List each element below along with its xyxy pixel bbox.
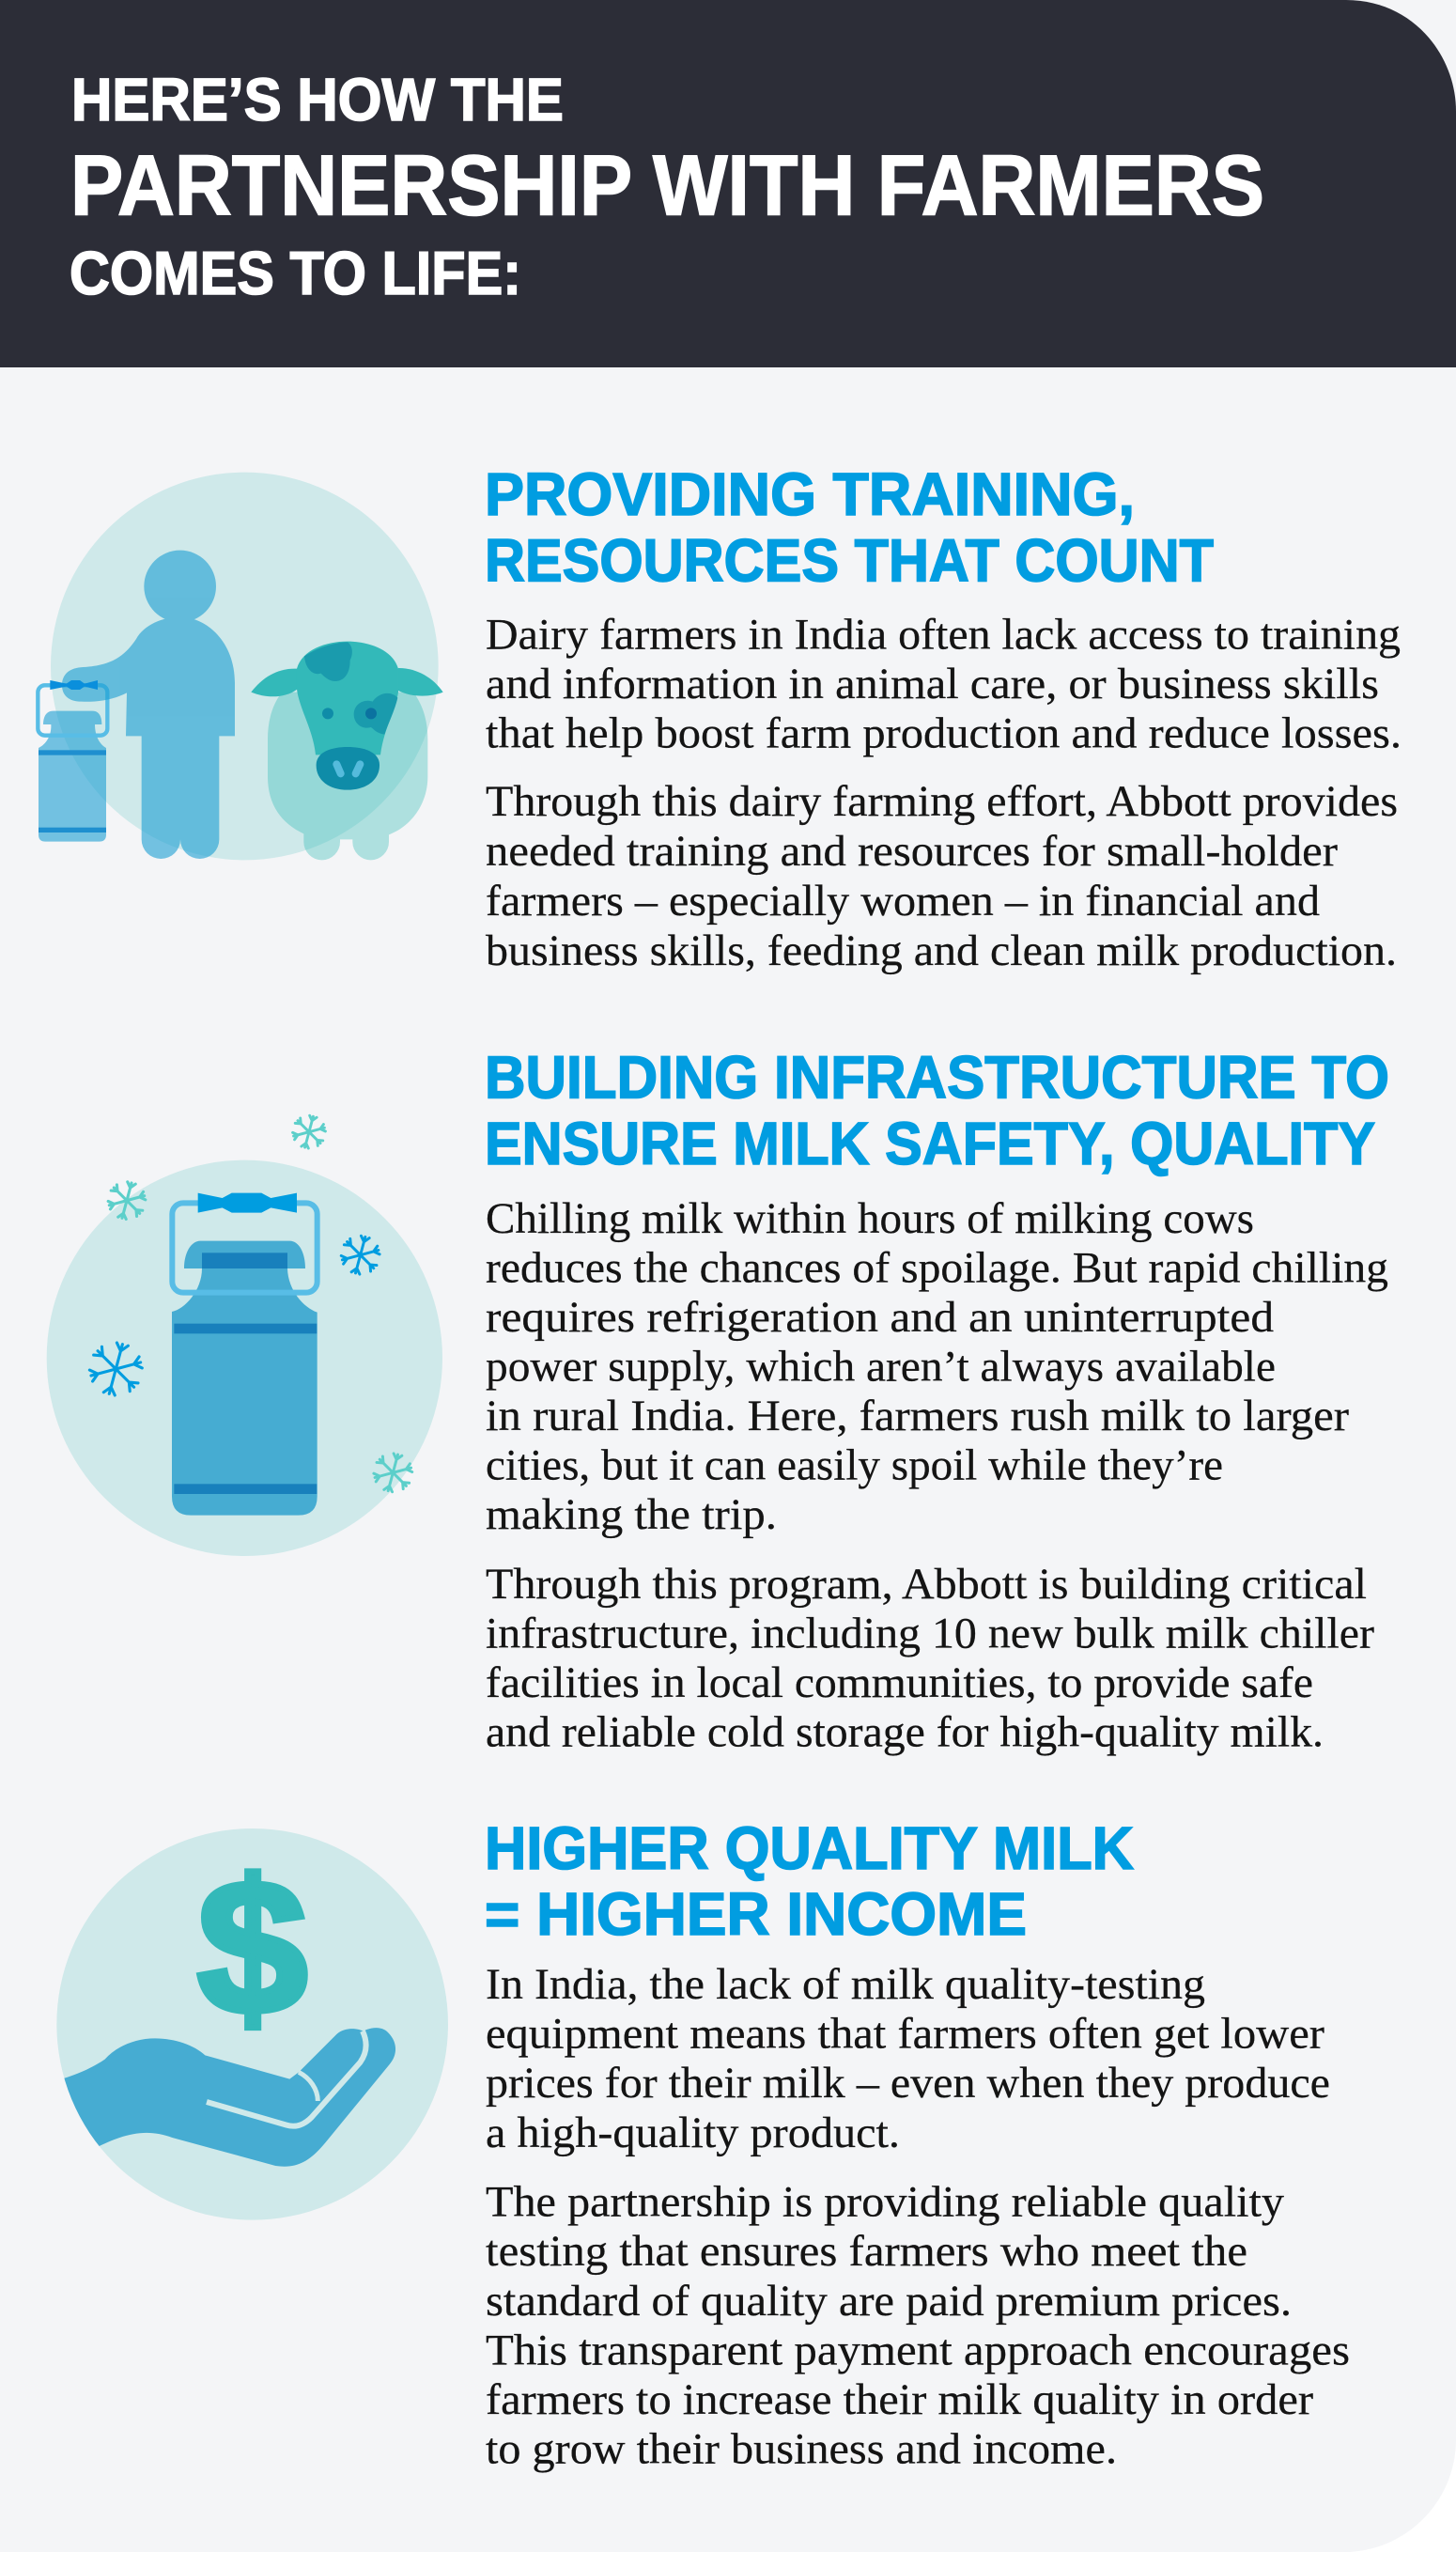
can clamp [50,680,98,690]
section 3 body text: standard of quality are paid premium prices. [486,2277,1292,2326]
section 1 body text: needed training and resources for small-holder [486,827,1338,876]
section 1 body text: Through this dairy farming effort, Abbott provides [486,777,1398,826]
section 1 body text [486,611,1402,975]
section 3 body text: equipment means that farmers often get lower [486,2010,1324,2059]
section 2 heading: ENSURE MILK SAFETY, QUALITY [485,1110,1375,1177]
section 2 body text: reduces the chances of spoilage. But rapid chilling [486,1243,1388,1292]
section 3 heading: HIGHER QUALITY MILK [485,1814,1134,1882]
section 2 body text: facilities in local communities, to provide safe [486,1658,1313,1707]
hand [59,2028,395,2167]
section 2 body text: in rural India. Here, farmers rush milk to larger [486,1392,1349,1440]
cow body [268,692,427,860]
section 2 heading: BUILDING INFRASTRUCTURE TO [485,1044,1389,1112]
section 2 body text: Chilling milk within hours of milking cows [486,1194,1254,1243]
section 3 heading [485,1814,1134,1948]
section 3 body text: In India, the lack of milk quality-testing [486,1960,1205,2009]
farmer [62,551,235,859]
section 2 body text [486,1194,1388,1756]
section 3 body text: a high-quality product. [486,2109,900,2157]
cow head [251,642,443,790]
section 3 body text: prices for their milk – even when they produce [486,2059,1330,2108]
section 1 body text: business skills, feeding and clean milk production. [486,926,1397,975]
section 3 body text: This transparent payment approach encourages [486,2326,1350,2375]
section 3 body text: to grow their business and income. [486,2424,1117,2473]
section 3 body text: testing that ensures farmers who meet the [486,2227,1247,2276]
section 1 heading: PROVIDING TRAINING, [485,460,1135,528]
section 2 body text: power supply, which aren’t always available [486,1342,1276,1391]
section 1 body text: and information in animal care, or business skills [486,660,1379,708]
section 3 heading: = HIGHER INCOME [485,1880,1027,1948]
section 2 heading [485,1044,1389,1177]
title: PARTNERSHIP WITH FARMERS [70,139,1264,233]
icon: dollar sign over open hand [56,1828,448,2220]
section 2 body text: and reliable cold storage for high-quality milk. [486,1707,1324,1756]
header banner [0,0,1456,367]
title: COMES TO LIFE: [70,239,521,307]
section 1 heading: RESOURCES THAT COUNT [485,526,1214,594]
section 2 body text: making the trip. [486,1490,777,1539]
milk can [172,1193,318,1516]
title: HERE’S HOW THE [71,66,564,133]
icon: farmer, milk can and cow [38,473,443,860]
section 2 body text: cities, but it can easily spoil while they’re [486,1441,1223,1490]
section 3 body text: The partnership is providing reliable quality [486,2178,1285,2227]
section 1 body text: that help boost farm production and reduce losses. [486,708,1402,757]
milk can [38,685,107,842]
dollar sign: $ [197,1842,307,2055]
section 3 body text [486,1960,1350,2473]
section 1 body text: Dairy farmers in India often lack access to training [486,611,1401,660]
section 2 body text: requires refrigeration and an uninterrupted [486,1293,1274,1342]
icon: snowflakes [85,1113,415,1496]
section 1 heading [485,460,1214,594]
title [70,66,1264,307]
section 3 body text: farmers to increase their milk quality in order [486,2375,1313,2424]
section 2 body text: infrastructure, including 10 new bulk milk chiller [486,1609,1374,1657]
section 1 body text: farmers – especially women – in financial and [486,877,1320,926]
section 2 body text: Through this program, Abbott is building critical [486,1560,1367,1609]
icon: milk can with snowflakes [47,1113,442,1556]
